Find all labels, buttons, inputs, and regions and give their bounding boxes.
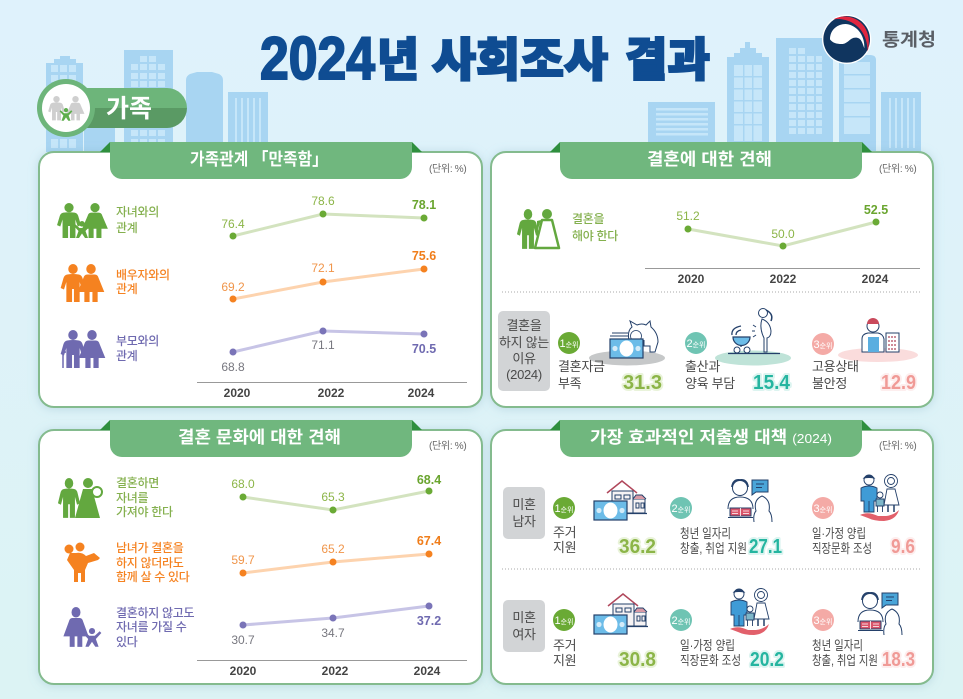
line chart: marriage culture: 67.4 <box>417 534 441 548</box>
section badge: family: 가족 <box>106 95 152 123</box>
label: should have children after marriage: 결혼하면 <box>116 476 159 490</box>
reason 3: employment instability: 고용상태 <box>812 359 859 374</box>
reason 2: childbirth and childcare: 15.4 <box>753 372 791 394</box>
reason 2: childbirth and childcare: 출산과 <box>685 359 720 374</box>
header: low-birth policy: 가장 효과적인 저출생 대책 (2024) <box>590 428 832 447</box>
icon: couple embracing <box>64 542 100 582</box>
line chart: marriage culture: 59.7 <box>231 553 255 567</box>
label: should marry: 결혼을 <box>572 212 604 226</box>
reason 1: wedding funds: 31.3 <box>623 372 662 394</box>
reason 2: childbirth and childcare: 2순위 <box>686 338 706 350</box>
women rank 2: work-family balance: 일·가정 양립 <box>680 638 735 653</box>
men rank 3: work-family balance: 9.6 <box>891 536 915 558</box>
label: with parents: 부모와의 <box>116 334 159 348</box>
reason 1: wedding funds <box>558 321 665 394</box>
label: unmarried women: 미혼 <box>512 610 536 625</box>
label: should have children after marriage: 가져야 한다 <box>116 505 173 519</box>
men rank 2: youth jobs: 청년 일자리 <box>680 526 731 541</box>
label: reasons for not marrying <box>498 311 550 391</box>
panel: most effective low-birth policy <box>491 420 933 684</box>
label: unmarried men <box>503 487 545 539</box>
women rank 2: work-family balance: 직장문화 조성 <box>680 653 741 668</box>
men rank 3: work-family balance: 일·가정 양립 <box>812 526 866 541</box>
women rank 3: youth jobs: 18.3 <box>882 649 915 671</box>
men rank 2: youth jobs <box>670 480 782 558</box>
label: reasons for not marrying: 하지 않는 <box>499 335 549 350</box>
men rank 3: work-family balance <box>812 474 915 558</box>
header: views on marriage: 결혼에 대한 견해 <box>647 150 772 169</box>
reason 3: employment instability: 3순위 <box>813 339 833 351</box>
icon: elderly parents <box>61 330 105 368</box>
label: can live together without marriage: 함께 살 수 있다 <box>116 569 190 584</box>
label: unmarried women <box>503 600 545 652</box>
line chart: should marry: 51.2 <box>676 209 700 223</box>
icon: mother and child <box>63 607 101 647</box>
line chart: should marry: 2022 <box>770 272 797 286</box>
reason 1: wedding funds: 부족 <box>558 376 582 391</box>
women rank 1: housing: 주거 <box>553 638 576 653</box>
label: with spouse: 관계 <box>116 282 137 296</box>
women rank 1: housing: 1순위 <box>554 615 574 627</box>
label: unmarried men: 미혼 <box>512 497 536 512</box>
line chart: family relations: 75.6 <box>412 249 436 263</box>
title: 년 <box>377 34 419 86</box>
reason 2: childbirth and childcare: 양육 부담 <box>685 376 735 391</box>
city skyline background left <box>46 50 268 152</box>
label: can have children without marriage: 자녀를 가질 수 <box>116 620 187 634</box>
label: can have children without marriage: 결혼하지 않고도 <box>116 606 194 620</box>
icon: wedding couple <box>58 478 102 518</box>
line chart: marriage culture <box>197 473 467 678</box>
women rank 1: housing <box>553 594 656 671</box>
label: can live together without marriage: 남녀가 결혼을 <box>116 541 183 555</box>
label: reasons for not marrying: (2024) <box>506 367 542 382</box>
label: with children: 자녀와의 <box>116 205 159 219</box>
panel: views on marriage <box>491 142 933 407</box>
line chart: marriage culture: 68.4 <box>417 473 441 487</box>
line chart: family relations: 2022 <box>318 386 345 400</box>
logo: Statistics Korea: 통계청 <box>882 30 936 50</box>
title: 사회조사 <box>432 34 608 86</box>
line chart: family relations: 2020 <box>224 386 251 400</box>
men rank 2: youth jobs: 2순위 <box>671 503 691 515</box>
unit note: (단위: %) <box>429 162 466 175</box>
reason 1: wedding funds: 결혼자금 <box>558 359 605 374</box>
header: low-birth policy <box>550 420 872 457</box>
header: views on marriage <box>550 142 872 179</box>
title <box>260 25 710 92</box>
women rank 2: work-family balance <box>670 588 784 671</box>
unit note: (단위: %) <box>879 439 916 452</box>
section badge: family <box>37 79 187 137</box>
icon: spouses <box>61 264 104 302</box>
women rank 3: youth jobs: 청년 일자리 <box>812 638 863 653</box>
header: marriage culture <box>100 420 422 457</box>
men rank 3: work-family balance: 직장문화 조성 <box>812 541 872 556</box>
panel: family relations satisfaction <box>39 142 482 407</box>
women rank 3: youth jobs <box>812 593 915 671</box>
men rank 2: youth jobs: 창출, 취업 지원 <box>680 541 747 556</box>
women rank 3: youth jobs: 창출, 취업 지원 <box>812 653 878 668</box>
women rank 2: work-family balance: 20.2 <box>750 649 784 671</box>
line chart: family relations: 72.1 <box>311 261 335 275</box>
label: with spouse: 배우자와의 <box>116 268 170 282</box>
men rank 3: work-family balance: 3순위 <box>813 503 833 515</box>
line chart: marriage culture: 65.3 <box>321 490 345 504</box>
label: reasons for not marrying: 이유 <box>512 351 536 366</box>
logo: Statistics Korea <box>822 15 936 64</box>
header: family relations <box>100 142 422 179</box>
men rank 1: housing: 36.2 <box>619 536 656 558</box>
line chart: family relations: 70.5 <box>412 342 436 356</box>
line chart: family relations: 78.1 <box>412 198 436 212</box>
icon: parents with child <box>57 203 108 238</box>
reason 3: employment instability: 불안정 <box>812 376 847 391</box>
line chart: marriage culture: 37.2 <box>417 614 441 628</box>
women rank 3: youth jobs: 3순위 <box>813 615 833 627</box>
icon: bride and groom <box>517 209 559 249</box>
label: with parents: 관계 <box>116 349 137 363</box>
line chart: marriage culture: 34.7 <box>321 626 345 640</box>
line chart: marriage culture: 65.2 <box>321 542 345 556</box>
line chart: should marry: 2020 <box>678 272 705 286</box>
line chart: family relations: 71.1 <box>311 338 335 352</box>
label: should have children after marriage: 자녀를 <box>116 491 148 505</box>
women rank 1: housing: 30.8 <box>619 649 656 671</box>
men rank 1: housing: 지원 <box>553 540 576 555</box>
line chart: marriage culture: 2024 <box>414 664 441 678</box>
label: with children: 관계 <box>116 221 137 235</box>
line chart: family relations: 68.8 <box>221 360 245 374</box>
reason 3: employment instability: 12.9 <box>881 372 916 394</box>
title: 결과 <box>625 34 710 86</box>
line chart: should marry: 2024 <box>862 272 889 286</box>
reason 2: childbirth and childcare <box>685 308 791 394</box>
line chart: family relations: 2024 <box>408 386 435 400</box>
men rank 1: housing: 1순위 <box>554 503 574 515</box>
label: can have children without marriage: 있다 <box>116 635 138 649</box>
label: unmarried men: 남자 <box>512 514 536 529</box>
reason 1: wedding funds: 1순위 <box>559 338 579 350</box>
line chart: marriage culture: 2020 <box>230 664 257 678</box>
city skyline background right <box>648 38 921 152</box>
line chart: should marry <box>645 203 920 286</box>
label: unmarried women: 여자 <box>512 627 536 642</box>
line chart: should marry: 52.5 <box>864 203 888 217</box>
women rank 1: housing: 지원 <box>553 653 576 668</box>
line chart: marriage culture: 2022 <box>322 664 349 678</box>
label: reasons for not marrying: 결혼을 <box>507 318 542 333</box>
line chart: family relations: 69.2 <box>221 280 245 294</box>
men rank 1: housing <box>553 481 656 558</box>
unit note: (단위: %) <box>879 162 916 175</box>
men rank 2: youth jobs: 27.1 <box>749 536 782 558</box>
title: 2024 <box>260 25 376 92</box>
unit note: (단위: %) <box>429 439 466 452</box>
line chart: family relations: 78.6 <box>311 194 335 208</box>
line chart: should marry: 50.0 <box>771 227 795 241</box>
label: should marry: 해야 한다 <box>572 229 618 243</box>
label: can live together without marriage: 하지 않더라도 <box>116 556 184 570</box>
women rank 2: work-family balance: 2순위 <box>671 615 691 627</box>
men rank 1: housing: 주거 <box>553 525 576 540</box>
line chart: family relations: 76.4 <box>221 217 245 231</box>
reason 3: employment instability <box>812 318 918 394</box>
line chart: marriage culture: 30.7 <box>231 633 255 647</box>
line chart: family relations <box>197 194 467 400</box>
line chart: marriage culture: 68.0 <box>231 477 255 491</box>
panel: views on marriage culture <box>39 420 482 684</box>
header: family relations: 가족관계 「만족함」 <box>190 150 328 169</box>
header: marriage culture: 결혼 문화에 대한 견해 <box>178 428 341 447</box>
